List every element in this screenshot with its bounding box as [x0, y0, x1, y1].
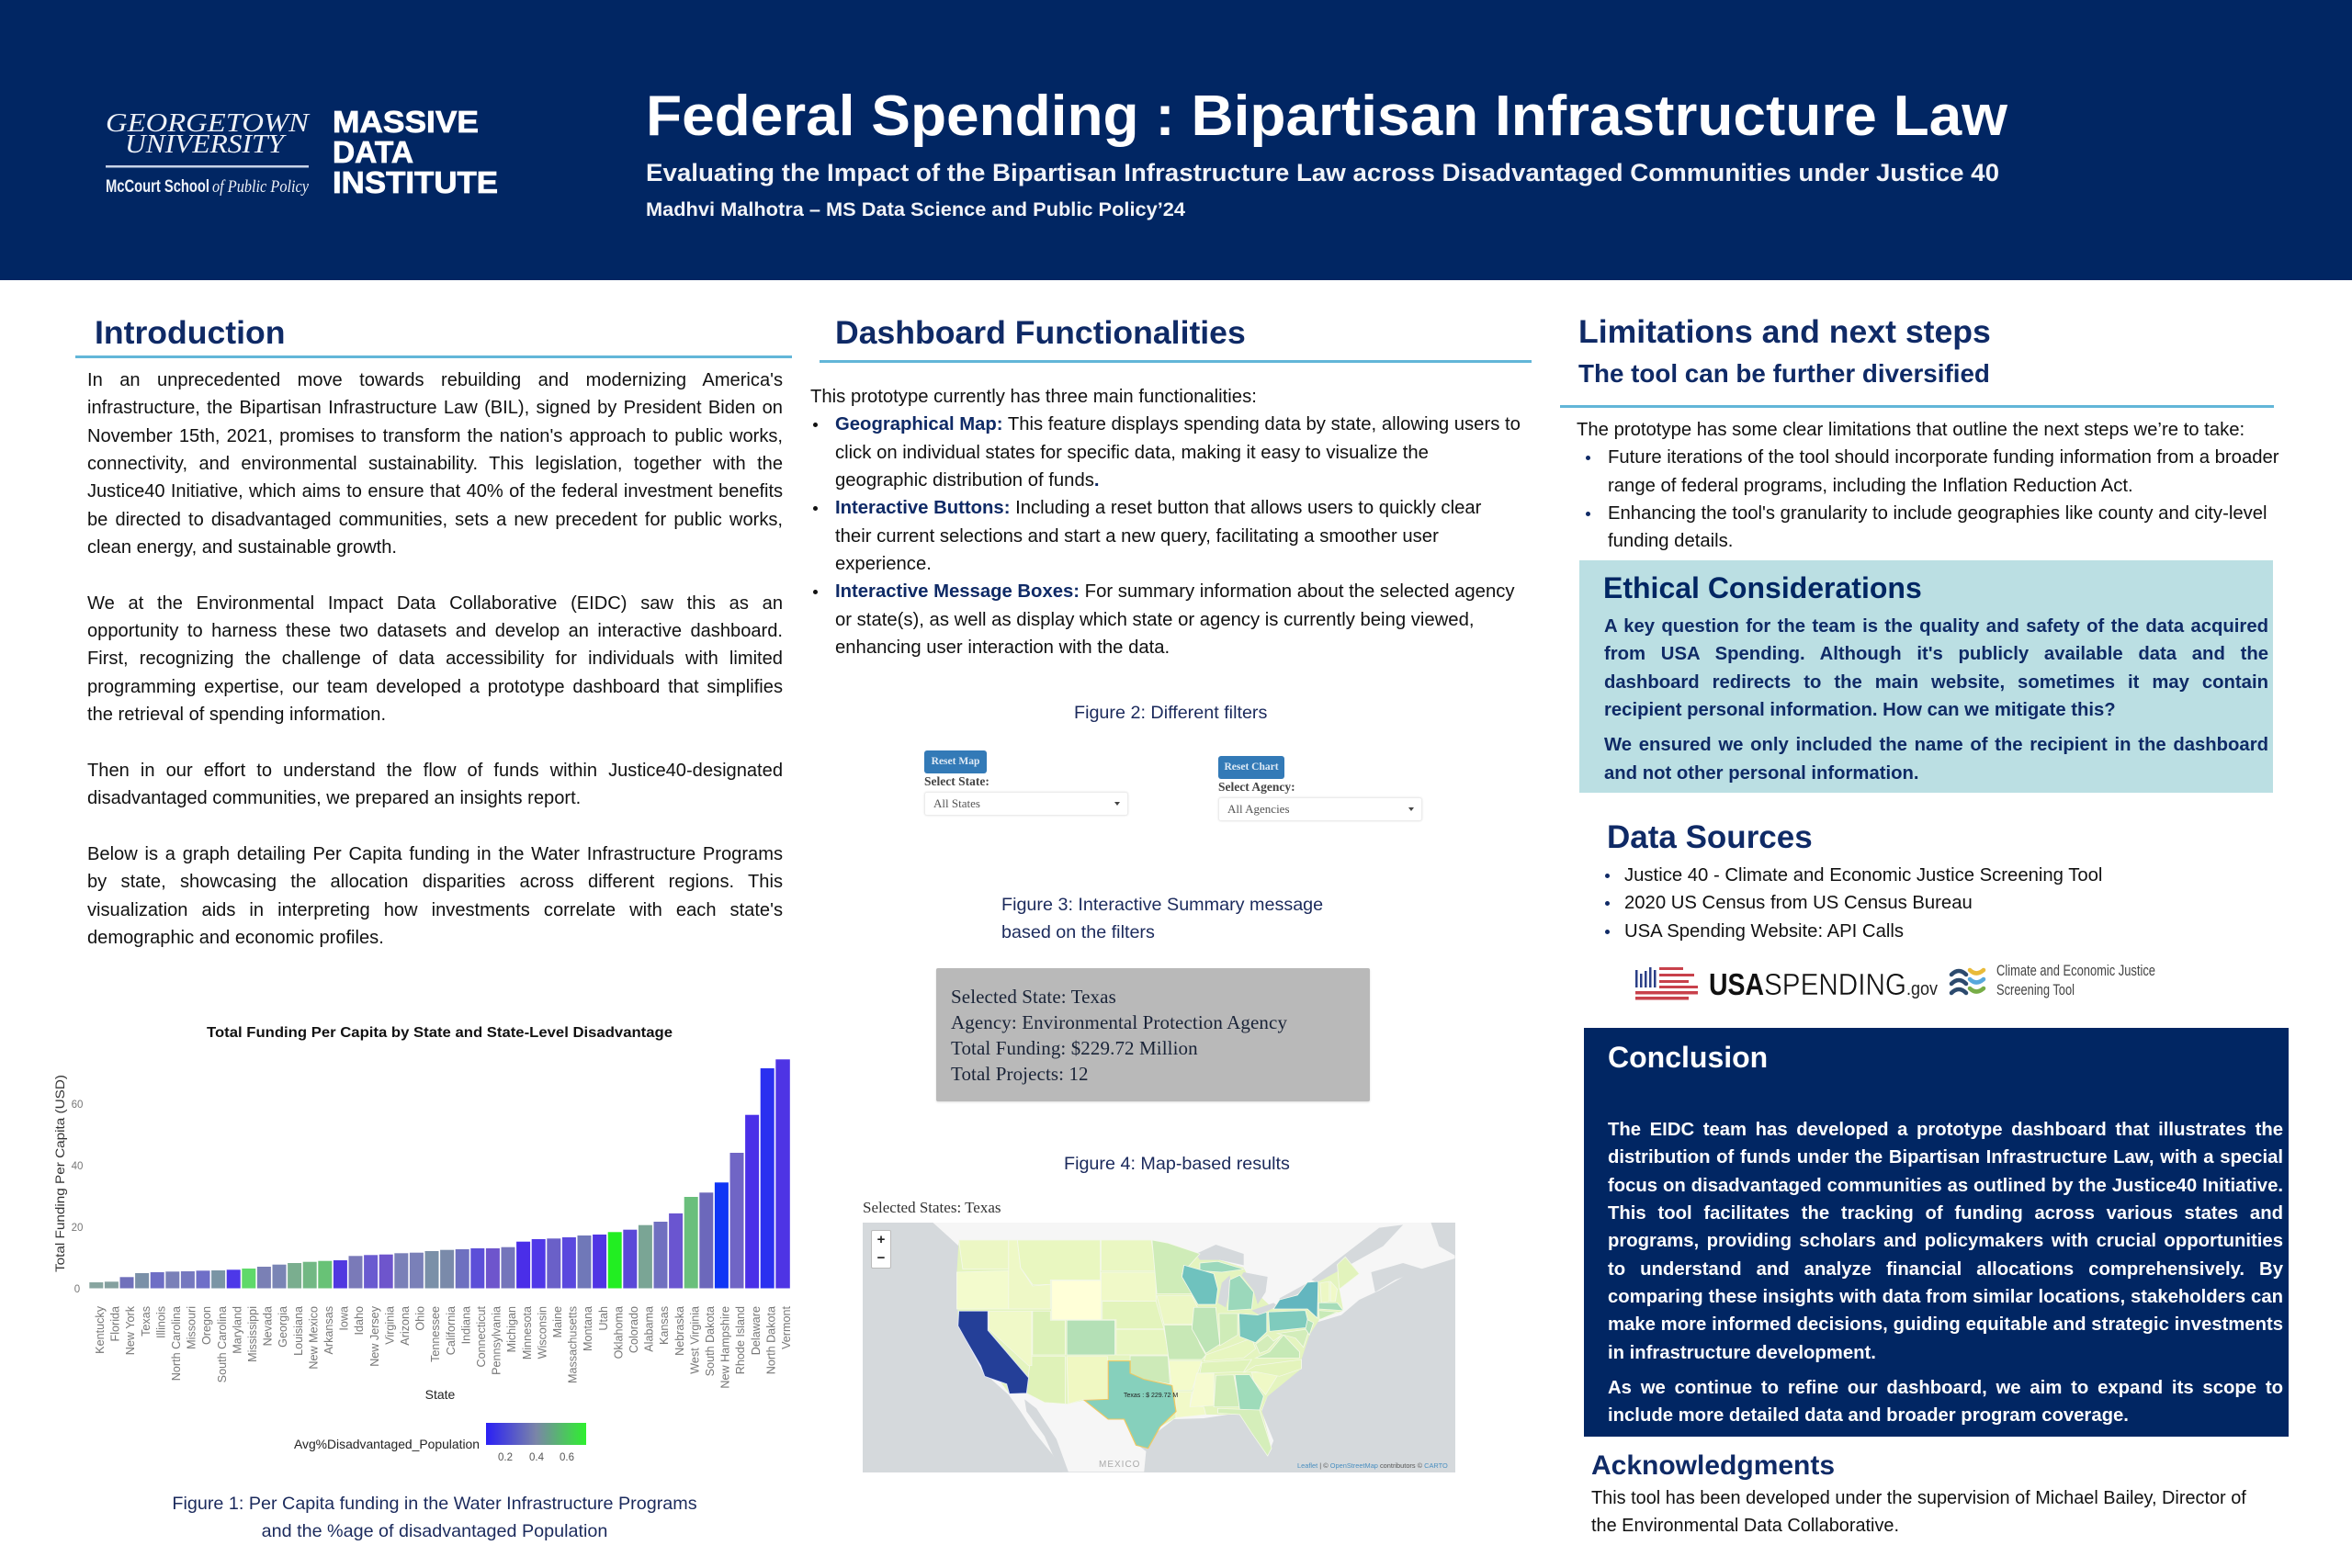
state labels: Tennessee: [429, 1306, 442, 1362]
caption: figure 2: Figure 2: Different filters: [1074, 703, 1267, 723]
bars: [89, 1059, 790, 1288]
state labels: Arizona: [399, 1306, 412, 1346]
state labels: Ohio: [414, 1306, 427, 1331]
text block: limitations list: range of federal programs, including the Inflation Reduction Act.: [1608, 476, 2133, 496]
text block: introduction paragraphs: infrastructure, the Bipartisan Infrastructure Law (BIL), signed by President Biden on: [87, 398, 783, 418]
text block: conclusion: This tool facilitates the tracking of funding across various states and: [1608, 1203, 2283, 1224]
text block: functionalities list: This prototype currently has three main functionalities:: [810, 387, 1257, 407]
text block: ethical question: [1604, 616, 2268, 784]
y axis ticks: 20: [72, 1223, 83, 1234]
state labels: New York: [124, 1305, 137, 1355]
text block: introduction paragraphs: disadvantaged communities, we prepared an insights report.: [87, 788, 581, 808]
text block: functionalities list: Interactive Buttons: Including a reset button that allows users to quickly clear: [835, 498, 1481, 518]
text block: introduction paragraphs: Below is a graph detailing Per Capita funding in the Water Infrastructure Programs: [87, 844, 783, 864]
state labels: Kansas: [658, 1306, 671, 1345]
text block: conclusion: programs, providing scholars and policymakers with crucial opportunities: [1608, 1231, 2283, 1251]
map zoom control: [871, 1230, 891, 1269]
state labels: New Hampshire: [719, 1306, 732, 1389]
y axis ticks: [72, 1100, 83, 1295]
US underlay: [956, 1240, 1359, 1456]
map zoom control: −: [877, 1250, 885, 1266]
figure 3: summary message box: [936, 968, 1370, 1101]
y axis ticks: 0: [74, 1284, 80, 1295]
filter: state: Reset Map: [932, 756, 979, 767]
title: Evaluating the Impact of the Bipartisan Infrastructure Law across Disadvantaged Communities under Justice 40: [646, 159, 1999, 186]
text block: functionalities list: enhancing user interaction with the data.: [835, 637, 1170, 658]
text block: ethical question: and not other personal information.: [1604, 763, 1919, 784]
state labels: Idaho: [353, 1306, 366, 1336]
text block: conclusion: include more detailed data and broader program coverage.: [1608, 1405, 2129, 1426]
great lakes and canadian water: [1196, 1223, 1455, 1315]
filter: state: All States: [933, 796, 980, 810]
text block: functionalities list: experience.: [835, 554, 932, 574]
text block: introduction paragraphs: the retrieval of spending information.: [87, 705, 386, 725]
text block: introduction paragraphs: We at the Environmental Impact Data Collaborative (EIDC) saw this as an: [87, 593, 783, 614]
state labels: [94, 1305, 793, 1389]
figure 3: summary message box: Selected State: Texas: [951, 986, 1116, 1008]
text block: ethical question: recipient personal information. How can we mitigate this?: [1604, 700, 2116, 720]
state labels: Maine: [551, 1306, 564, 1337]
map zoom control: +: [877, 1232, 885, 1247]
text block: introduction paragraphs: connectivity, and environmental sustainability. This legislation, together with the: [87, 454, 783, 474]
text block: functionalities list: geographic distribution of funds.: [835, 470, 1100, 491]
text block: limitations list: Future iterations of the tool should incorporate funding information from a broader: [1608, 447, 2279, 468]
map label: Mexico: MEXICO: [1099, 1460, 1140, 1470]
state labels: Louisiana: [292, 1306, 305, 1356]
text block: limitations list: Enhancing the tool's granularity to include geographies like county and city-level: [1608, 503, 2267, 524]
text block: conclusion: [1608, 1120, 2283, 1426]
filter: state: [924, 750, 1128, 816]
state labels: Oklahoma: [612, 1306, 625, 1359]
heading: Acknowledgments: Acknowledgments: [1591, 1450, 1835, 1481]
state labels: Kentucky: [94, 1305, 107, 1354]
panel: dashboard functionalities: [810, 314, 1532, 658]
state labels: Mississippi: [246, 1306, 259, 1362]
heading: Ethical Considerations: Ethical Considerations: [1603, 571, 1922, 604]
heading: Introduction: Introduction: [95, 314, 285, 351]
logo: USAspending.gov: SPENDING: [1764, 967, 1906, 1001]
text block: introduction paragraphs: [87, 370, 783, 948]
text block: introduction paragraphs: by state, showcasing the allocation disparities across different regions. This: [87, 872, 783, 892]
state labels: Iowa: [338, 1306, 351, 1331]
text block: introduction paragraphs: First, recognizing the challenge of data accessibility for individuals with limited: [87, 649, 783, 669]
panel: conclusion: [1584, 1028, 2289, 1437]
caption: figure 4: Figure 4: Map-based results: [1064, 1154, 1290, 1174]
caption: figure 1: and the %age of disadvantaged Population: [262, 1521, 607, 1541]
text block: acknowledgments: the Environmental Data Collaborative.: [1591, 1516, 1899, 1536]
caption: figure 3: based on the filters: [1001, 922, 1155, 942]
text block: limitations list: [1577, 420, 2279, 551]
text block: introduction paragraphs: opportunity to harness these two datasets and develop an interactive dashboard.: [87, 621, 783, 641]
title: Federal Spending : Bipartisan Infrastructure Law: [646, 85, 2008, 148]
state labels: Missouri: [186, 1306, 198, 1349]
subheading: The tool can be further diversified: [1578, 359, 1990, 388]
text block: conclusion: to understand and analyze financial allocations comprehensively. By: [1608, 1259, 2283, 1280]
panel: acknowledgments: [1591, 1450, 2246, 1536]
text block: functionalities list: click on individual states for specific data, making it easy to visualize the: [835, 443, 1429, 463]
state labels: Delaware: [750, 1306, 763, 1355]
state labels: South Carolina: [216, 1306, 229, 1382]
text block: functionalities list: their current selections and start a new query, facilitating a smoother user: [835, 526, 1439, 547]
text block: ethical question: A key question for the team is the quality and safety of the data acquired: [1604, 616, 2268, 637]
logo: Georgetown University McCourt School: McCourt School: [106, 177, 209, 197]
list: sources: USA Spending Website: API Calls: [1624, 921, 1904, 942]
filter: state: Select State:: [924, 774, 989, 788]
y axis title: Total Funding Per Capita (USD): [52, 1075, 67, 1272]
caption: figure 3: Figure 3: Interactive Summary message: [1001, 895, 1323, 915]
state labels: South Dakota: [704, 1306, 717, 1376]
legend: 0.2: [498, 1452, 513, 1463]
list: sources: Justice 40 - Climate and Economic Justice Screening Tool: [1624, 865, 2102, 886]
figure 2: filter controls: [924, 750, 1422, 821]
state labels: Montana: [582, 1306, 594, 1351]
text block: introduction paragraphs: clean energy, and sustainable growth.: [87, 537, 397, 558]
figure 3: summary message box: Total Funding: $229.72 Million: [951, 1037, 1198, 1059]
logo: USAspending.gov: .gov: [1906, 979, 1938, 999]
panel: limitations and next steps: [1560, 313, 2279, 551]
heading: Data Sources: Data Sources: [1607, 819, 1813, 855]
header banner: [0, 0, 2352, 280]
text block: introduction paragraphs: Justice40 Initiative, which aims to ensure that 40% of the federal investment benefits: [87, 481, 783, 502]
heading: Conclusion: Conclusion: [1608, 1041, 1768, 1074]
state labels: Rhode Island: [734, 1306, 747, 1374]
state labels: Texas: [140, 1306, 153, 1337]
figure 3: summary message box: Agency: Environmental Protection Agency: [951, 1011, 1287, 1033]
state labels: New Jersey: [368, 1305, 381, 1367]
caption: figure 1: Figure 1: Per Capita funding in the Water Infrastructure Programs: [172, 1494, 697, 1514]
map attribution: Leaflet | © OpenStreetMap contributors © CARTO: [1297, 1461, 1448, 1470]
text block: conclusion: comparing these insights with data from similar locations, stakeholders can: [1608, 1287, 2283, 1307]
title: Madhvi Malhotra – MS Data Science and Public Policy’24: [646, 199, 1185, 220]
text block: introduction paragraphs: November 15th, 2021, promises to transform the nation's approach to public works,: [87, 426, 783, 446]
logo: Massive Data Institute: INSTITUTE: [333, 165, 498, 199]
state labels: North Carolina: [170, 1306, 183, 1381]
logo: Georgetown University McCourt School: GEORGETOWN: [106, 109, 311, 138]
state labels: Utah: [597, 1306, 610, 1331]
map label: Texas value: Texas : $ 229.72 M: [1124, 1393, 1178, 1399]
logo: Massive Data Institute: DATA: [333, 135, 413, 169]
state labels: Indiana: [459, 1306, 472, 1344]
logo: Georgetown University McCourt School: [106, 105, 498, 199]
text block: introduction paragraphs: programming expertise, our team developed a prototype dashboard that simplifies: [87, 677, 783, 697]
list: sources: 2020 US Census from US Census Bureau: [1624, 893, 1973, 913]
chart title: Total Funding Per Capita by State and State-Level Disadvantage: [207, 1025, 673, 1041]
text block: functionalities list: [810, 387, 1521, 658]
state labels: Pennsylvania: [491, 1306, 503, 1375]
figure 4: choropleth map: [863, 1223, 1455, 1472]
text block: ethical question: from USA Spending. Although it's publicly available data and the: [1604, 644, 2268, 664]
text block: introduction paragraphs: be directed to disadvantaged communities, sets a new precedent for public works,: [87, 510, 783, 530]
figure 4: selected state label: Selected States: Texas: [863, 1199, 1001, 1216]
filter: agency: Select Agency:: [1218, 780, 1295, 794]
logo: Climate and Economic Justice Screening Tool: [1950, 962, 2155, 998]
logo: USAspending.gov: USA: [1709, 967, 1764, 1001]
legend: [294, 1423, 586, 1463]
state labels: Nebraska: [673, 1306, 686, 1356]
state labels: Colorado: [628, 1306, 640, 1353]
list: sources: [1605, 865, 2102, 942]
land: [933, 1223, 1455, 1472]
state labels: Georgia: [277, 1306, 289, 1348]
state labels: Nevada: [262, 1306, 275, 1346]
panel: introduction: [75, 314, 792, 948]
state labels: Wisconsin: [536, 1306, 548, 1359]
state labels: Massachusetts: [567, 1306, 580, 1383]
text block: conclusion: As we continue to refine our dashboard, we aim to expand its scope to: [1608, 1378, 2283, 1398]
logo: Climate and Economic Justice Screening Tool: Screening Tool: [1996, 981, 2075, 998]
text block: functionalities list: Geographical Map: This feature displays spending data by state, allowing users to: [835, 414, 1521, 434]
state labels: California: [445, 1306, 458, 1355]
state labels: Virginia: [383, 1306, 396, 1345]
text block: conclusion: make more informed decisions, guiding equitable and strategic investments: [1608, 1314, 2283, 1335]
state labels: Connecticut: [475, 1306, 488, 1368]
state labels: Minnesota: [521, 1306, 534, 1359]
logo: Massive Data Institute: [333, 105, 498, 199]
filter: agency: All Agencies: [1227, 802, 1290, 816]
caption: figure 1: [172, 1494, 697, 1541]
legend: 0.6: [560, 1452, 574, 1463]
text block: ethical question: dashboard redirects to the main website, sometimes it may contain: [1604, 672, 2268, 693]
y axis ticks: 60: [72, 1100, 83, 1111]
state labels: North Dakota: [764, 1306, 777, 1374]
text block: functionalities list: Interactive Message Boxes: For summary information about the selected agency: [835, 581, 1515, 602]
state labels: Florida: [109, 1306, 122, 1341]
state labels: Michigan: [505, 1306, 518, 1352]
x axis title: State: [425, 1387, 456, 1402]
text block: introduction paragraphs: demographic and economic profiles.: [87, 928, 384, 948]
filter: agency: [1218, 756, 1422, 821]
states: [956, 1240, 1359, 1456]
state labels: Vermont: [780, 1306, 793, 1349]
text block: limitations list: The prototype has some clear limitations that outline the next steps we’re to take:: [1577, 420, 2245, 440]
text block: introduction paragraphs: Then in our effort to understand the flow of funds within Justice40-designated: [87, 761, 783, 781]
text block: conclusion: focus on disadvantaged communities as outlined by the Justice40 Initiative.: [1608, 1176, 2283, 1196]
title: [646, 85, 2008, 220]
logo: Climate and Economic Justice Screening Tool: Climate and Economic Justice: [1996, 962, 2155, 979]
heading: Dashboard Functionalities: Dashboard Functionalities: [835, 314, 1246, 351]
panel: data sources: [1605, 819, 2102, 942]
state labels: Oregon: [200, 1306, 213, 1345]
caption: figure 3: [1001, 895, 1323, 942]
panel: ethical considerations: [1579, 560, 2273, 793]
text block: introduction paragraphs: visualization aids in interpreting how investments correlate with each state's: [87, 900, 783, 920]
text block: functionalities list: or state(s), as well as display which state or agency is currently being viewed,: [835, 610, 1475, 630]
state labels: Arkansas: [322, 1306, 335, 1354]
text block: conclusion: The EIDC team has developed a prototype dashboard that illustrates the: [1608, 1120, 2283, 1140]
state labels: Alabama: [643, 1306, 656, 1352]
text block: acknowledgments: This tool has been developed under the supervision of Michael Bailey, Director of: [1591, 1488, 2246, 1508]
state labels: West Virginia: [688, 1306, 701, 1374]
filter: agency: Reset Chart: [1224, 761, 1279, 773]
logo: Georgetown University McCourt School: UNIVERSITY: [125, 130, 288, 159]
text block: limitations list: funding details.: [1608, 531, 1733, 551]
text block: ethical question: We ensured we only included the name of the recipient in the dashboard: [1604, 735, 2268, 755]
legend: Avg%Disadvantaged_Population: [294, 1437, 480, 1451]
legend: 0.4: [529, 1452, 545, 1463]
state labels: Maryland: [231, 1306, 243, 1354]
y axis ticks: 40: [72, 1161, 83, 1172]
text block: acknowledgments: [1591, 1488, 2246, 1536]
text block: conclusion: distribution of funds under the Bipartisan Infrastructure Law, with a special: [1608, 1147, 2283, 1168]
logo: Massive Data Institute: MASSIVE: [333, 105, 479, 139]
logo: Georgetown University McCourt School: of Public Policy: [212, 177, 309, 197]
logo: USAspending.gov: [1635, 967, 1938, 1001]
state labels: New Mexico: [307, 1306, 320, 1370]
figure 3: summary message box: Total Projects: 12: [951, 1063, 1089, 1085]
text block: conclusion: in infrastructure development.: [1608, 1343, 1876, 1363]
state labels: Illinois: [154, 1306, 167, 1338]
heading: Limitations and next steps: Limitations and next steps: [1578, 313, 1991, 350]
text block: introduction paragraphs: In an unprecedented move towards rebuilding and modernizing America's: [87, 370, 783, 390]
bar chart: total funding per capita by state: [52, 1025, 793, 1463]
